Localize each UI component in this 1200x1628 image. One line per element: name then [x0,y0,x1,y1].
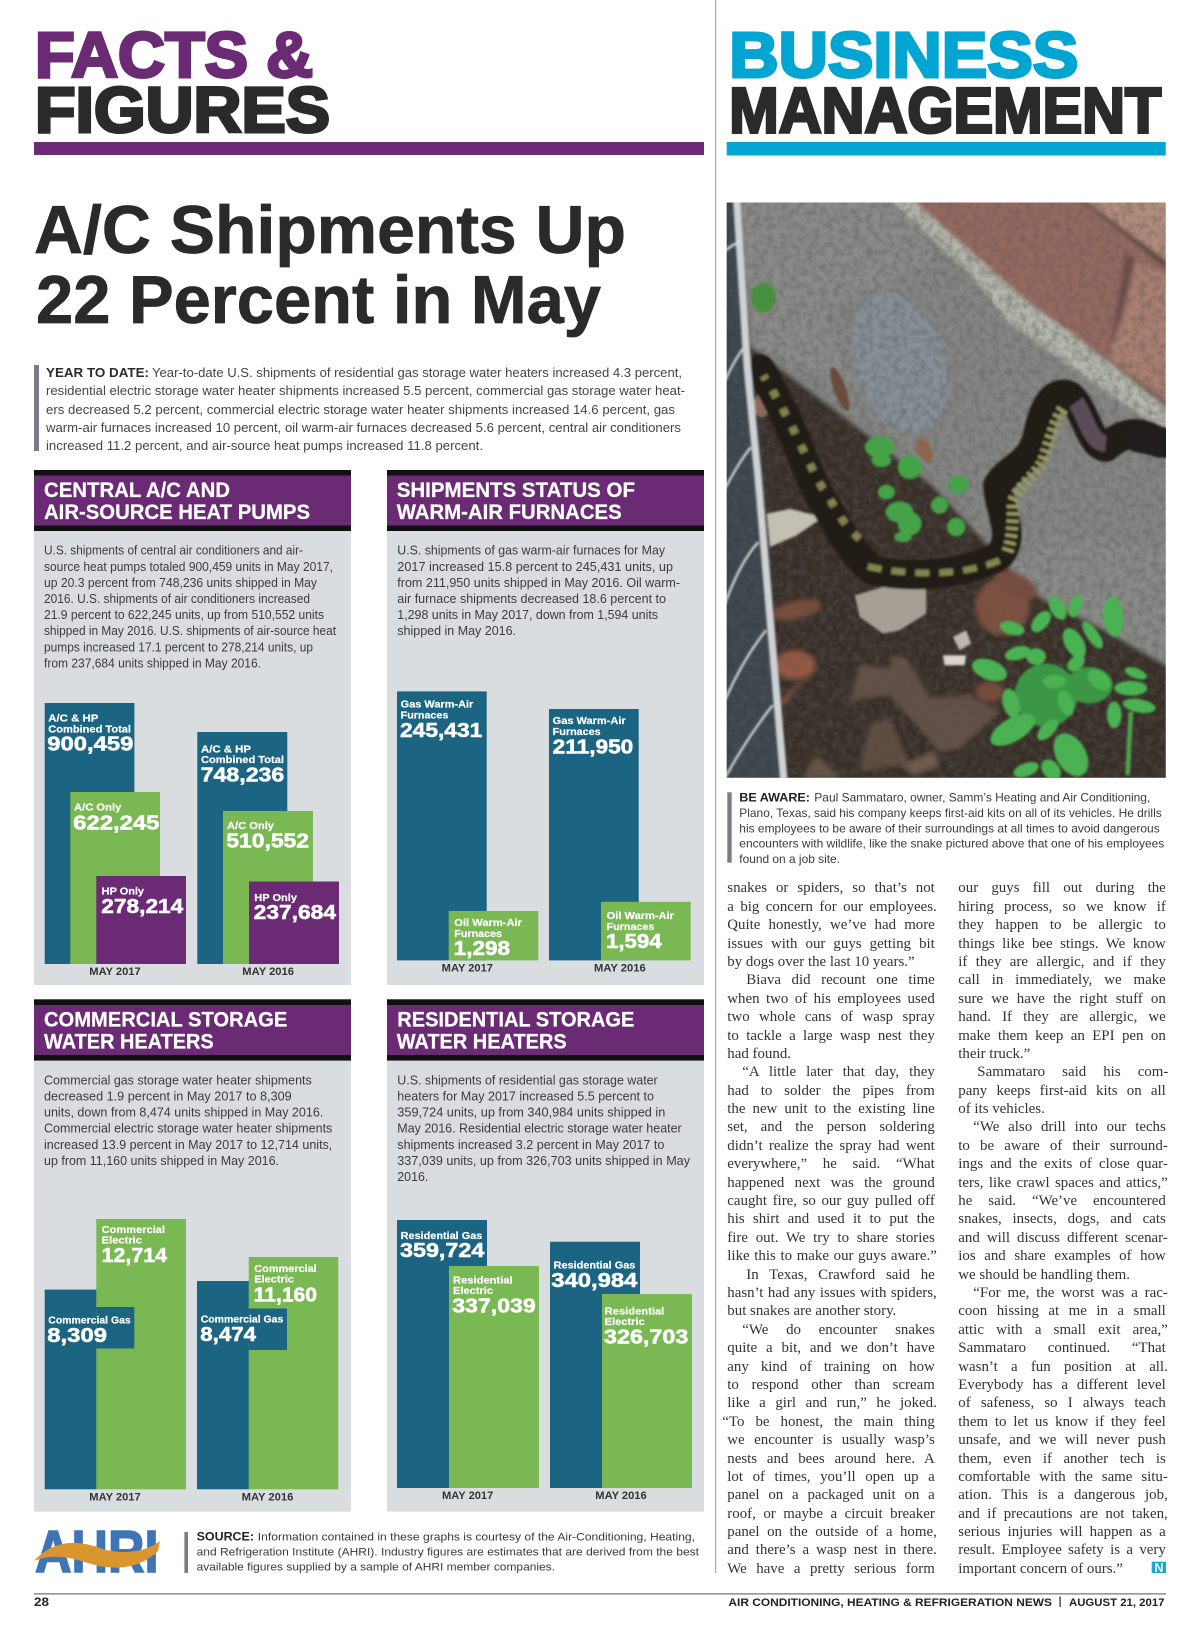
bar chart: May 2016: Commercial [254,1263,317,1275]
caption: be aware: encounters with wildlife, like the snake pictured above that one of his employees [739,838,1165,851]
text block: year to date: YEAR TO DATE: [46,365,149,380]
heading: Facts & Figures: FACTS & [35,19,313,91]
article column 1: We have a pretty serious form [727,1561,935,1577]
article column 1: “A little later that day, they [742,1064,935,1080]
caption: be aware: his employees to be aware of their surroundings at all times to avoid dangerous [739,822,1160,835]
article column 1: fire out. We try to share stories [727,1230,935,1246]
panel text: 1,298 units in May 2017, down from 1,594 units [397,607,658,622]
bar chart: May 2017: Furnaces [454,928,502,940]
footer: AUGUST 21, 2017 [1069,1597,1164,1609]
article column 1: Quite honestly, we’ve had more [727,917,935,933]
bar chart: May 2016: MAY 2016 [242,1491,293,1503]
bar chart: May 2017: MAY 2017 [442,962,493,974]
text block: year to date: ers decreased 5.2 percent, commercial electric storage water heater shipments increased 14.6 percent, gas [46,402,675,417]
bar chart: May 2017: Oil Warm-Air [454,917,522,929]
bar chart: May 2017: 622,245 [73,812,159,834]
article column 2: “For me, the worst was a rac- [973,1285,1168,1301]
bar chart: May 2017: 278,214 [101,896,184,918]
panel text: 21.9 percent to 622,245 units, up from 510,552 units [44,607,324,622]
panel text: source heat pumps totaled 900,459 units in May 2017, [44,559,333,574]
panel text: U.S. shipments of gas warm-air furnaces for May [397,543,666,558]
caption: be aware: found on a job site. [739,853,840,866]
panel text: shipped in May 2016. U.S. shipments of air-source heat [44,623,336,638]
panel: shipments status of warm-air furnaces [387,470,704,985]
panel text: up 20.3 percent from 748,236 units shipped in May [44,575,318,590]
panel text: U.S. shipments of central air conditioners and air- [44,543,303,558]
bar chart: May 2016: 237,684 [254,902,337,924]
article column 2: ation. This is a dangerous job, [958,1487,1168,1503]
panel heading: CENTRAL A/C AND [44,479,230,502]
article column 1: caught fire, so our guy pulled off [727,1193,935,1209]
article column 1: nests and bees around here. A [727,1450,935,1466]
bar chart: May 2017: A/C & HP [48,713,98,725]
panel text [44,543,336,670]
article column 2: them, even if another tech is [958,1450,1166,1466]
article column 1: didn’t realize the spray had went [727,1138,935,1154]
article column 2: and will discuss different scenar- [958,1230,1168,1246]
panel: central A/C and air-source heat pumps [34,470,351,985]
article column 1: two whole cans of wasp spray [727,1009,935,1025]
bar chart: May 2017 [397,1220,539,1502]
bar chart: May 2017: Electric [453,1285,493,1297]
bar chart: May 2016: Electric [605,1316,645,1328]
article column 2: sure we have the right stuff on [958,991,1166,1007]
bar chart: May 2017: 359,724 [400,1240,485,1262]
bar chart: May 2016: Commercial Gas [201,1314,283,1326]
bar chart: May 2016: MAY 2016 [594,962,646,974]
article column 1: and there’s a wasp nest in there. [727,1542,937,1558]
panel text [397,1072,691,1184]
caption: be aware: Plano, Texas, said his company keeps first-aid kits on all of its vehicles. He drills [739,807,1162,820]
text block: year to date: residential electric storage water heater shipments increased 5.5 percent, commercial gas storage water heat- [46,383,685,398]
bar chart: May 2017 [45,1219,186,1503]
panel text: from 211,950 units shipped in May 2016. Oil warm- [397,575,680,590]
bar chart: May 2017: 1,298 [454,938,510,960]
bar chart: May 2016: Residential Gas [554,1260,635,1272]
heading: Business Management [727,19,1166,156]
bar chart: May 2016: 1,594 [606,931,663,953]
bar chart: May 2016 [197,732,339,978]
bar chart: May 2017: MAY 2017 [89,1491,141,1503]
title: A/C Shipments Up [34,192,626,268]
article column 2: if they are allergic, and if they [958,954,1166,970]
panel heading: AIR-SOURCE HEAT PUMPS [44,501,310,524]
article column 1: had to solder the pipes from [727,1083,935,1099]
bar chart: May 2016: 211,950 [553,736,633,758]
caption: be aware: Paul Sammataro, owner, Samm’s Heating and Air Conditioning, [814,792,1150,805]
article column 1: In Texas, Crawford said he [746,1267,935,1283]
photo: snake beside a concrete foundation [720,196,1172,785]
panel text [44,1072,332,1168]
bar chart: May 2016: Furnaces [553,726,601,738]
article column 2: “We also drill into our techs [973,1119,1166,1135]
footer [34,1593,1166,1609]
heading: Facts & Figures [34,19,704,155]
article column 1: hasn’t had any issues with spiders, [727,1285,937,1301]
bar chart: May 2017: 337,039 [452,1295,536,1317]
bar chart: May 2017: Gas Warm-Air [401,699,473,711]
panel text: 2016. [397,1169,428,1184]
article column 1: had found. [727,1046,791,1062]
bar chart: May 2016: 510,552 [226,830,309,852]
text block: source: Information contained in these graphs is courtesy of the Air-Conditioning, Heating, [258,1532,695,1544]
footer: 28 [34,1597,50,1609]
article column 2: coon hissing at me in a small [958,1303,1166,1319]
article column 1: quite a bit, and we don’t have [727,1340,935,1356]
title: 22 Percent in May [36,262,601,338]
logo: AHRI: AHRI [35,1519,158,1585]
bar chart: May 2016: Residential [605,1305,664,1317]
panel text: units, down from 8,474 units shipped in May 2016. [44,1105,323,1120]
caption: be aware: BE AWARE: [739,792,810,805]
article column 1 [722,880,937,1577]
panel text: 359,724 units, up from 340,984 units shipped in [397,1105,665,1120]
bar chart: May 2017: MAY 2017 [442,1490,493,1502]
bar chart: May 2016: 748,236 [201,765,284,787]
panel heading: COMMERCIAL STORAGE [44,1008,287,1032]
article column 2: pany keeps first-aid kits on all [958,1083,1166,1099]
bar chart: May 2017 [45,703,186,978]
bar chart: May 2017: Furnaces [401,709,448,721]
panel heading: WARM-AIR FURNACES [397,501,622,524]
article column 2: of safeness, so I always teach [958,1395,1166,1411]
article column 2: of its vehicles. [958,1101,1045,1117]
caption: be aware [727,792,1165,866]
article column 1: any kind of training on how [727,1359,935,1375]
article column 1: to respond other than scream [727,1377,935,1393]
text block: year to date: warm-air furnaces increased 10 percent, oil warm-air furnaces decreased 5.6 percent, central air conditioners [45,420,681,435]
end mark: N logo [1152,1561,1166,1575]
bar chart: May 2016: Electric [254,1274,294,1286]
article column 2: call in immediately, we make [958,972,1166,988]
panel text: 2016. U.S. shipments of air conditioners increased [44,591,310,606]
article column 2: serious injuries will happen as a [958,1524,1166,1540]
panel text: from 237,684 units shipped in May 2016. [44,655,261,670]
panel: residential storage water heaters [387,999,704,1512]
panel heading [44,479,310,524]
panel text: pumps increased 17.1 percent to 278,214 units, up [44,639,313,654]
panel text: May 2016. Residential electric storage water heater [397,1121,682,1136]
article column 2 [958,880,1168,1577]
article column 1: panel on a packaged unit on a [727,1487,935,1503]
article column 2: their truck.” [958,1046,1030,1062]
article column 2: unsafe, and we will never push [958,1432,1166,1448]
heading: Business Management: MANAGEMENT [729,74,1161,146]
panel text: 337,039 units, up from 326,703 units shipped in May [397,1153,691,1168]
bar chart: May 2017: Commercial [102,1224,165,1236]
panel text [397,543,680,638]
article column 1: by dogs over the last 10 years.” [727,954,915,970]
panel heading: WATER HEATERS [44,1030,214,1054]
article column 1: like a girl and run,” he joked. [727,1395,937,1411]
bar chart: May 2016: A/C Only [227,820,274,832]
text block: source: available figures supplied by a sample of AHRI member companies. [197,1562,555,1574]
article column 2: Sammataro said his com- [977,1064,1168,1080]
article column 2: snakes, insects, dogs, and cats [958,1211,1166,1227]
article column 1: snakes or spiders, so that’s not [727,880,935,896]
article column 2: comfortable with the same situ- [958,1469,1168,1485]
panel heading [397,1008,634,1054]
text block: source: SOURCE: [197,1531,254,1544]
bar chart: May 2017: Commercial Gas [48,1315,131,1327]
bar chart: May 2016: HP Only [254,892,297,904]
text block: year to date: Year-to-date U.S. shipments of residential gas storage water heaters increased 4.3 percent, [152,365,682,380]
article column 1: “We do encounter snakes [742,1322,935,1338]
article column 2: hiring process, so we know if [958,899,1166,915]
article column 2: Sammataro continued. “That [958,1340,1166,1356]
article column 2: we should be handling them. [958,1267,1130,1283]
bar chart: May 2016: Combined Total [201,754,284,766]
heading: Facts & Figures: FIGURES [35,74,330,146]
bar chart: May 2017: 900,459 [47,733,133,755]
bar chart: May 2017: Electric [102,1234,142,1246]
article column 1: “To be honest, the main thing [722,1414,935,1430]
bar chart: May 2016 [197,1257,338,1503]
panel text: heaters for May 2017 increased 5.5 percent to [397,1088,654,1104]
title [34,192,626,338]
article column 1: but snakes are another story. [727,1303,896,1319]
bar chart: May 2017: Residential Gas [401,1230,482,1242]
article column 2: he said. “We’ve encountered [958,1193,1166,1209]
panel text: shipped in May 2016. [397,623,516,638]
bar chart: May 2017: 245,431 [400,720,482,742]
bar chart: May 2016: MAY 2016 [595,1490,647,1502]
panel text: shipments increased 3.2 percent in May 2017 to [397,1137,664,1152]
article column 2: to be aware of their surround- [958,1138,1168,1154]
article column 1: set, and the person soldering [727,1119,935,1135]
article column 2: Everybody has a different level [958,1377,1166,1393]
article column 1: we encounter is usually wasp’s [727,1432,935,1448]
bar chart: May 2016: MAY 2016 [242,966,294,978]
panel heading: WATER HEATERS [397,1030,567,1054]
article column 1: happened next was the ground [727,1175,935,1191]
panel text: air furnace shipments decreased 18.6 percent to [397,591,666,606]
panel text: decreased 1.9 percent in May 2017 to 8,309 [44,1088,292,1104]
panel text: increased 13.9 percent in May 2017 to 12,714 units, [44,1137,332,1152]
panel text: U.S. shipments of residential gas storage water [397,1072,658,1087]
article column 1: Biava did recount one time [746,972,935,988]
footer: AIR CONDITIONING, HEATING & REFRIGERATION NEWS [728,1597,1052,1609]
article column 1: the new unit to the existing line [727,1101,935,1117]
end mark: N logo: N [1154,1561,1164,1575]
article column 1: like this to make our guys aware.” [727,1248,937,1264]
article column 1: roof, or maybe a circuit breaker [727,1506,935,1522]
bar chart: May 2017: A/C Only [74,802,121,814]
article column 1: when two of his employees used [727,991,935,1007]
article column 2: important concern of ours.” [958,1561,1123,1577]
text block: year to date [34,365,685,453]
panel text: Commercial electric storage water heater shipments [44,1121,332,1136]
bar chart: May 2017 [397,691,538,974]
article column 2: result. Employee safety is a very [958,1542,1166,1558]
article column 2: things like bee stings. We know [958,936,1166,952]
bar chart: May 2016: 326,703 [604,1326,688,1348]
panel heading [44,1008,287,1054]
article column 1: his shirt and used it to put the [727,1211,935,1227]
article column 1: lot of times, you’ll open up a [727,1469,935,1485]
article column 1: everywhere,” he said. “What [727,1156,935,1172]
bar chart: May 2017: Combined Total [48,723,131,735]
bar chart: May 2017: 8,309 [47,1325,107,1347]
bar chart: May 2016 [549,709,691,974]
panel text: up from 11,160 units shipped in May 2016. [44,1153,279,1168]
article column 2: hand. If they are allergic, we [958,1009,1166,1025]
article column 2: they happen to be allergic to [958,917,1166,933]
article column 1: a big concern for our employees. [727,899,937,915]
bar chart: May 2016: A/C & HP [201,744,251,756]
heading: Business Management: BUSINESS [729,19,1078,91]
bar chart: May 2016: 11,160 [254,1284,317,1306]
article column 2: attic with a small exit area,” [958,1322,1168,1338]
bar chart: May 2017: MAY 2017 [89,966,141,978]
bar chart: May 2017: 12,714 [102,1245,168,1267]
article column 2: wasn’t a fun position at all. [958,1359,1168,1375]
bar chart: May 2017: HP Only [102,886,144,898]
panel: commercial storage water heaters [34,999,351,1512]
panel text: Commercial gas storage water heater shipments [44,1072,312,1087]
bar chart: May 2017: Residential [453,1274,513,1286]
bar chart: May 2016: Oil Warm-Air [607,910,674,922]
article column 1: panel on the outside of a home, [727,1524,937,1540]
text block: source: and Refrigeration Institute (AHRI). Industry figures are estimates that are derived from the best [197,1546,700,1558]
article column 2: ios and share examples of how [958,1248,1166,1264]
bar chart: May 2016: 8,474 [200,1324,257,1346]
panel text: 2017 increased 15.8 percent to 245,431 units, up [397,559,673,574]
bar chart: May 2016: Gas Warm-Air [553,715,626,727]
bar chart: May 2016: Furnaces [607,921,654,933]
article column 2: ters, like crawl spaces and attics,” [958,1175,1168,1191]
article column 2: ings and the exits of close quar- [958,1156,1168,1172]
article column 2: them to let us know if they feel [958,1414,1166,1430]
article column 2: and if precautions are not taken, [958,1506,1168,1522]
text block: source [184,1531,700,1574]
panel heading: SHIPMENTS STATUS OF [397,479,635,502]
panel heading: RESIDENTIAL STORAGE [397,1008,634,1032]
bar chart: May 2016 [550,1242,692,1502]
article column 2: our guys fill out during the [958,880,1166,896]
text block: year to date: increased 11.2 percent, and air-source heat pumps increased 11.8 percent. [46,438,483,453]
panel heading [397,479,635,524]
bar chart: May 2016: 340,984 [551,1270,638,1292]
article column 2: make them keep an EPI pen on [958,1028,1166,1044]
article column 1: issues with our guys getting bit [727,936,935,952]
article column 1: to tackle a large wasp nest they [727,1028,935,1044]
